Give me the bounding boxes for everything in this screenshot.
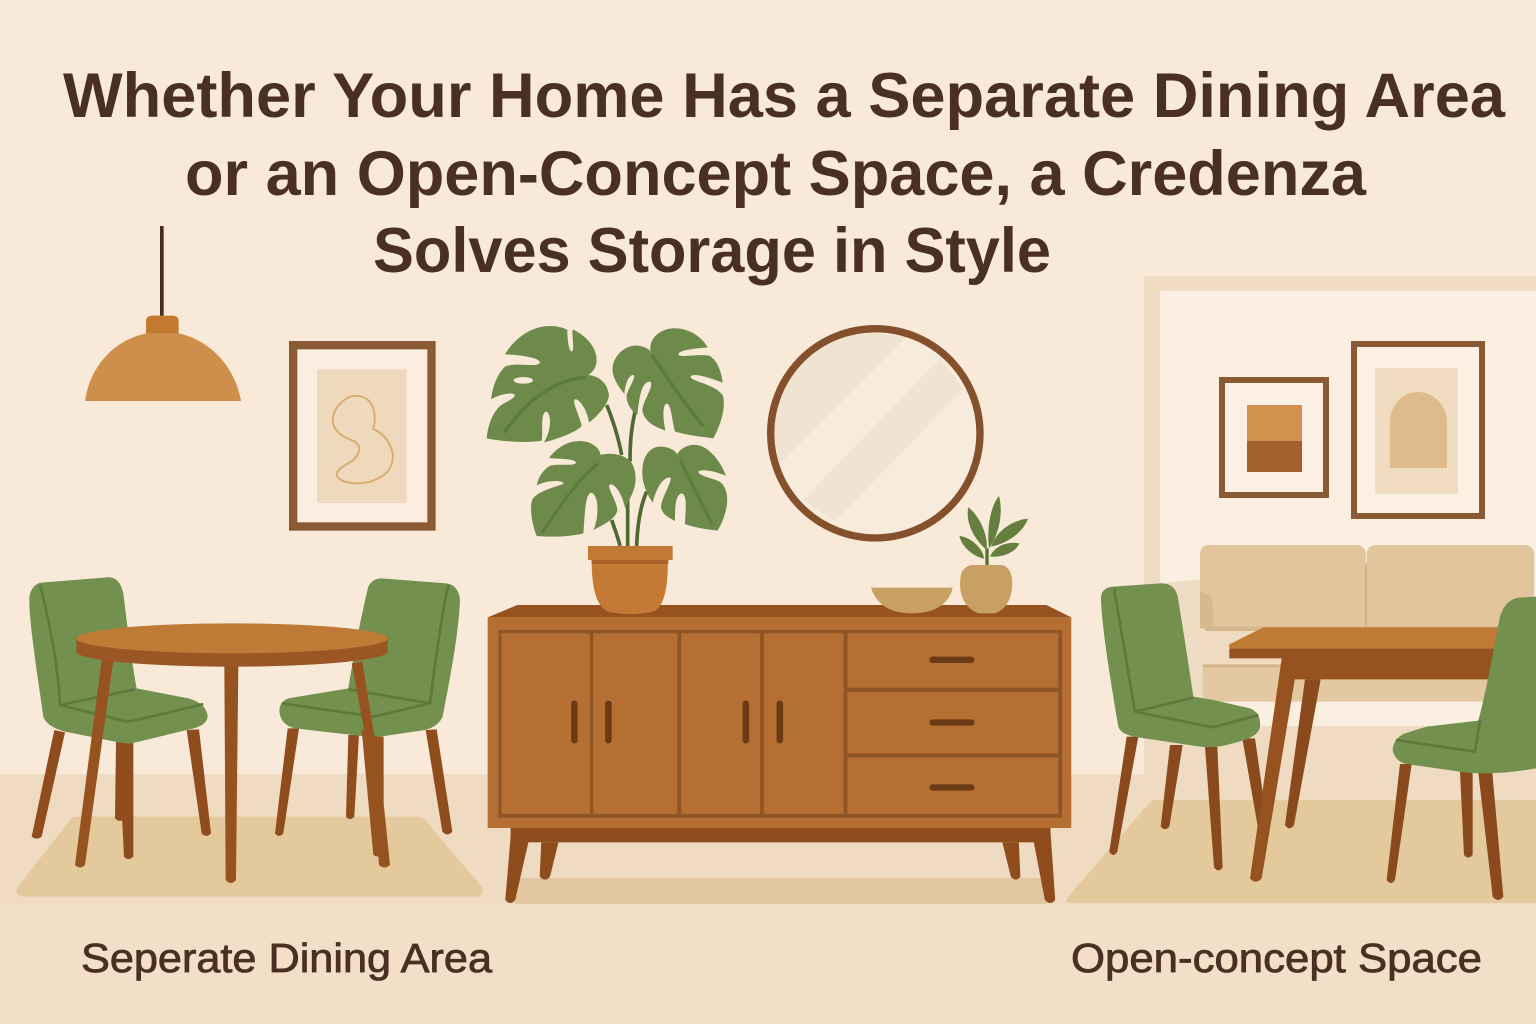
plant stems xyxy=(607,405,647,546)
credenza top xyxy=(488,605,1071,617)
round table xyxy=(75,623,390,883)
label: separate dining area: Seperate Dining Area xyxy=(81,935,492,981)
credenza xyxy=(488,605,1071,903)
leaf hole xyxy=(514,377,533,384)
label: open-concept space: Open-concept Space xyxy=(1071,935,1482,981)
open-concept dining set xyxy=(1101,583,1536,900)
rug right xyxy=(1067,800,1536,903)
leaf vein top right xyxy=(652,355,704,427)
floor xyxy=(0,774,1536,1024)
leaf lower right xyxy=(642,445,727,531)
framed abstract art, left xyxy=(289,341,436,531)
monstera plant xyxy=(487,326,727,546)
title: Solves Storage in Style xyxy=(373,216,1051,286)
left chair xyxy=(1101,583,1267,870)
leaf vein lower right xyxy=(680,460,712,523)
right chair xyxy=(1387,597,1536,900)
door and drawer panels xyxy=(501,633,1058,814)
credenza back legs and rail xyxy=(505,828,1055,903)
leaf lower left xyxy=(531,441,636,537)
rug left xyxy=(16,817,482,897)
wall art, small orange xyxy=(1222,380,1326,495)
rectangular table xyxy=(1229,627,1500,882)
right chair xyxy=(275,578,460,836)
sofa xyxy=(1167,545,1536,702)
round mirror xyxy=(760,320,980,538)
leaf vein top left xyxy=(504,377,587,433)
leaf top left xyxy=(487,326,609,442)
credenza inner frame xyxy=(498,630,1062,818)
title: Whether Your Home Has a Separate Dining Area xyxy=(63,61,1506,131)
left dining set xyxy=(29,577,460,883)
credenza shadow on floor xyxy=(515,878,1047,904)
title xyxy=(63,61,1506,286)
left chair xyxy=(29,577,211,859)
credenza body xyxy=(488,617,1071,828)
wall art, arch xyxy=(1354,344,1482,516)
leaf vein lower left xyxy=(542,463,598,533)
terracotta pot xyxy=(588,546,673,614)
open-concept wall recess xyxy=(1144,276,1536,786)
door and drawer handles xyxy=(571,657,974,791)
leaf top right xyxy=(613,328,724,438)
bowl xyxy=(871,588,953,613)
small potted plant xyxy=(959,496,1028,613)
pendant lamp xyxy=(85,226,241,401)
title: or an Open-Concept Space, a Credenza xyxy=(185,139,1367,209)
